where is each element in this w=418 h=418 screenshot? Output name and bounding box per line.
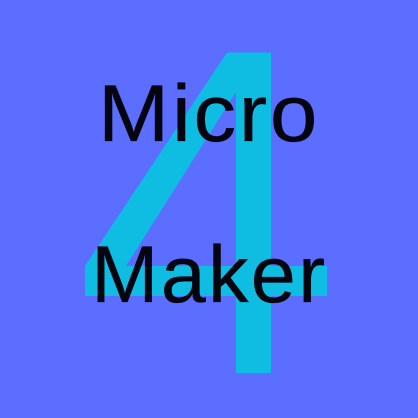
large numeral 4: [85, 52, 327, 373]
heading: Maker: Maker: [91, 230, 327, 320]
heading: Micro: Micro: [98, 68, 320, 159]
